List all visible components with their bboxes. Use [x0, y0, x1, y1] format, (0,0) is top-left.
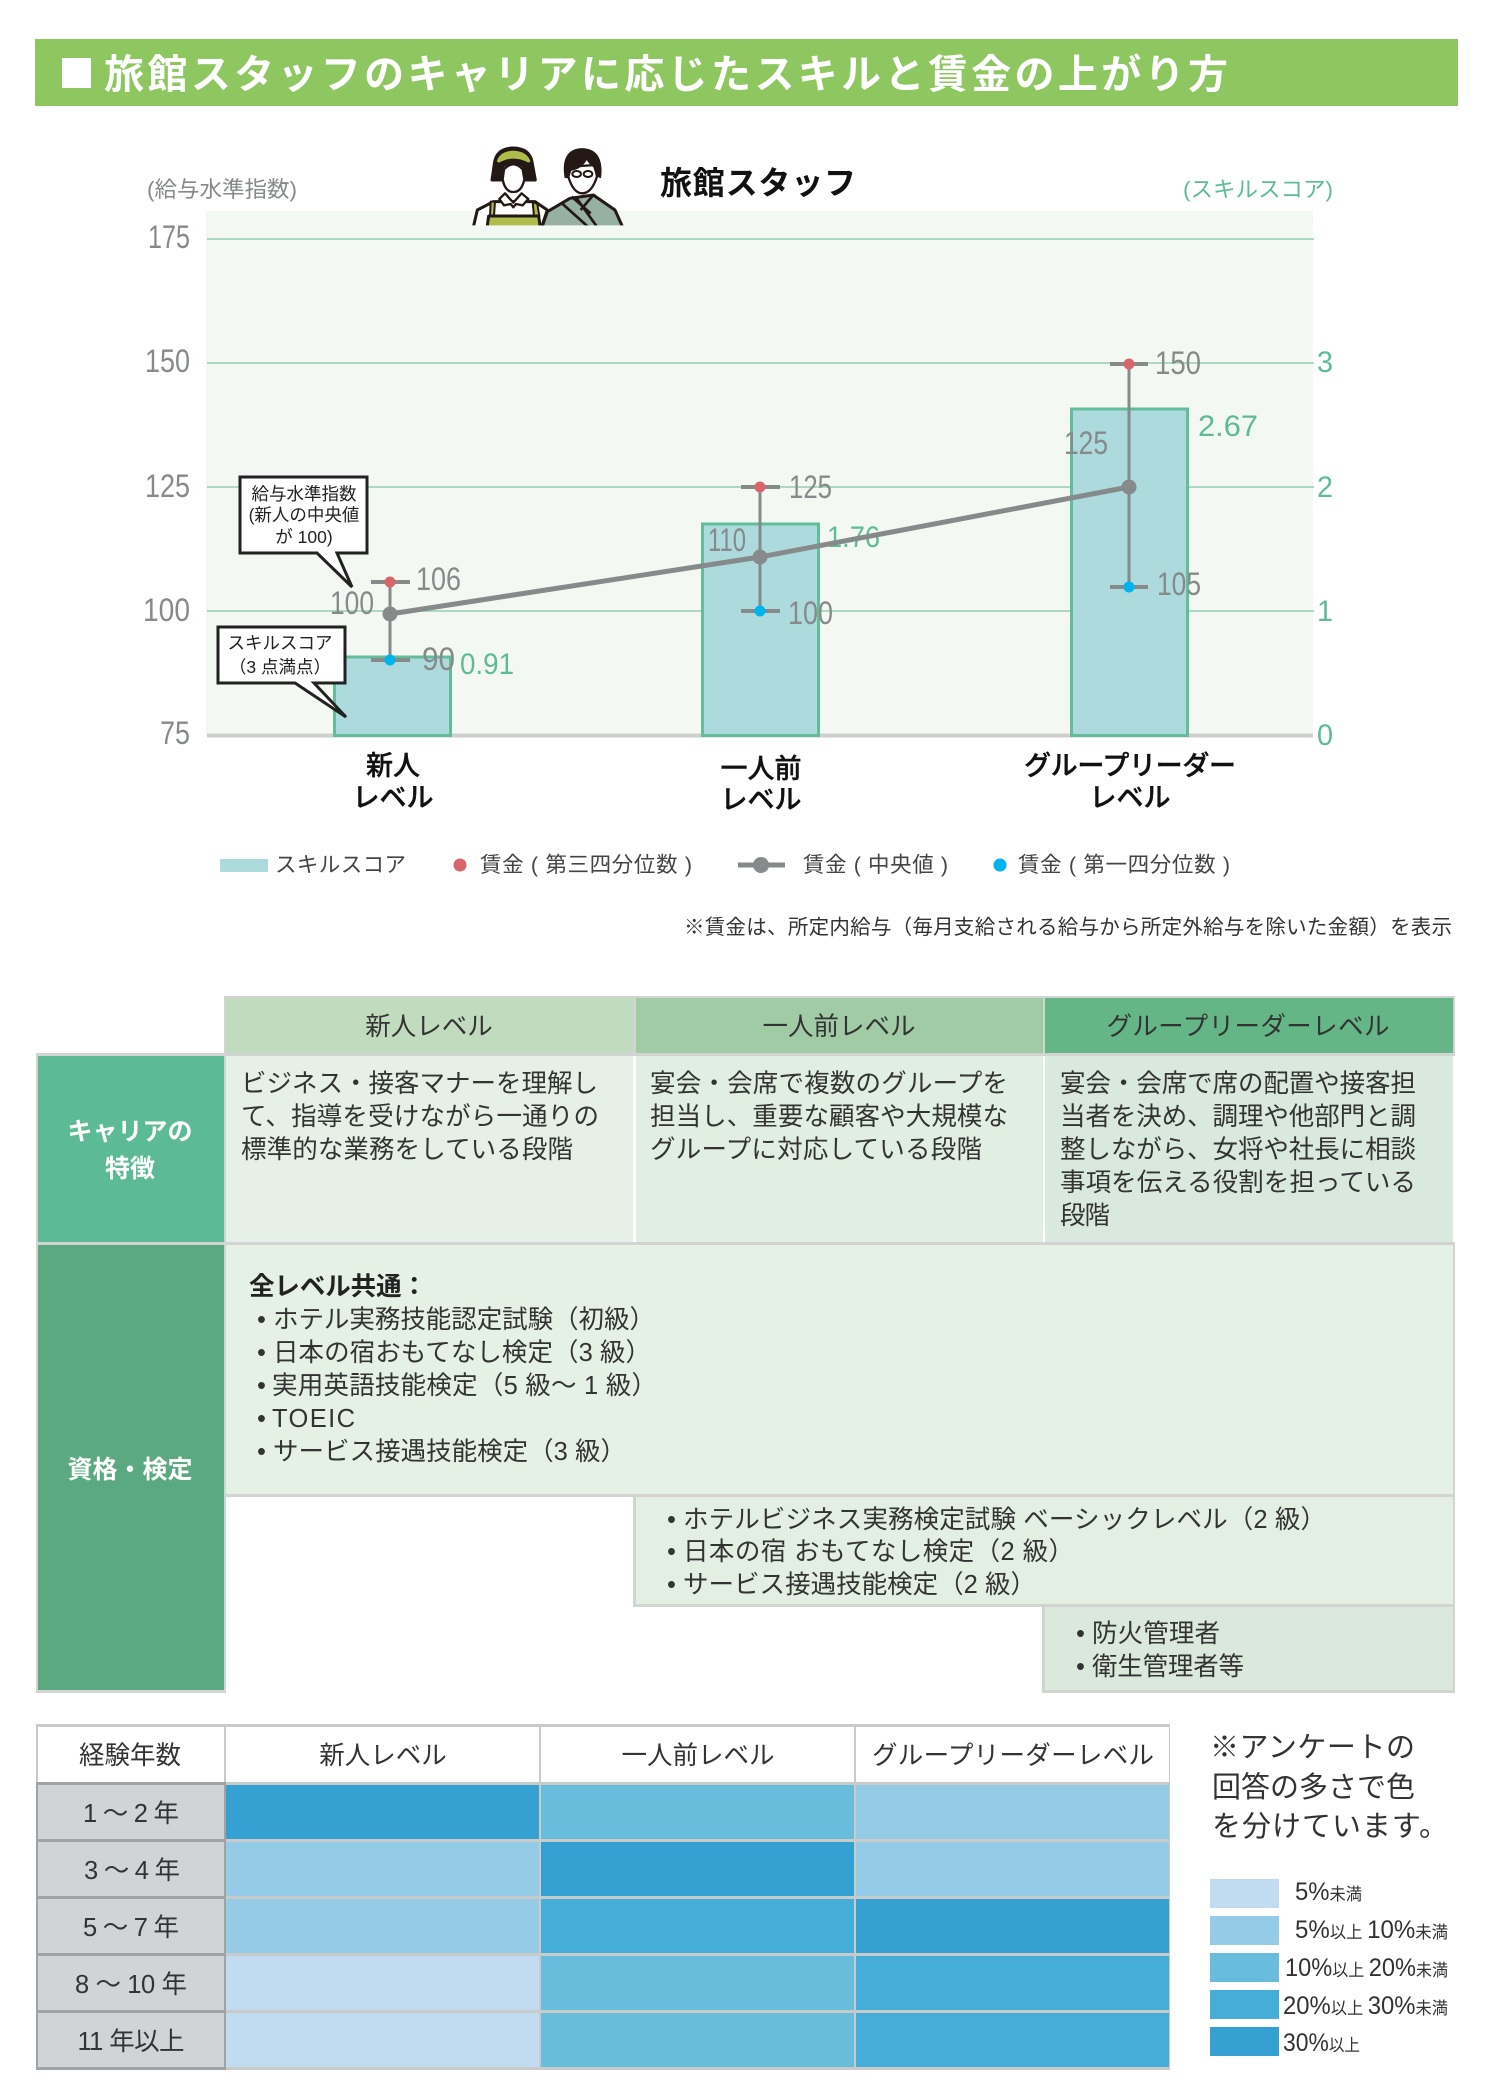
experience years heat table	[36, 1724, 1170, 2070]
right axis labels: 2	[1317, 471, 1333, 504]
block: qualifications for independent level and up	[633, 1494, 1455, 1607]
survey note: を分けています。	[1212, 1811, 1448, 1843]
category labels	[352, 751, 1236, 815]
chart: skill score and wage	[143, 211, 1333, 752]
cell: group leader characteristics	[1045, 1056, 1453, 1242]
callout: skill score: スキルスコア	[228, 633, 332, 653]
left axis title: (給与水準指数)	[147, 177, 297, 202]
cell: independent characteristics: グループに対応している段階	[650, 1136, 982, 1164]
block: qualifications for all levels: •	[257, 1438, 266, 1466]
right axis title: (スキルスコア)	[1183, 177, 1333, 202]
data value labels: 106	[416, 561, 461, 597]
block: qualifications for all levels: •	[257, 1306, 266, 1334]
left axis labels: 175	[148, 219, 190, 255]
data value labels	[330, 345, 1258, 681]
left axis labels: 125	[145, 468, 190, 504]
header: independent level	[636, 998, 1043, 1053]
chart subtitle: ryokan staff: 旅館スタッフ	[660, 165, 856, 201]
cell: group leader characteristics: 段階	[1060, 1202, 1110, 1230]
table header row: 新人レベル	[319, 1742, 447, 1770]
row label column: 8 ～ 10 年	[75, 1971, 187, 1999]
data value labels: 100	[788, 595, 833, 631]
category labels: グループリーダー	[1024, 751, 1236, 781]
row label column: 11 年以上	[78, 2028, 184, 2056]
block: qualifications for all levels: 実用英語技能検定（5 級～ 1 級）	[272, 1372, 657, 1400]
block: qualifications for group leader level: •	[1076, 1653, 1085, 1681]
table header row: 経験年数	[79, 1742, 181, 1770]
data value labels: 1.76	[827, 521, 880, 554]
heat legend: 30%以上	[1283, 2029, 1360, 2057]
block: qualifications for group leader level: 衛生管理者等	[1092, 1653, 1244, 1681]
heat legend: 10%以上 20%未満	[1285, 1954, 1448, 1982]
callout: skill score: （3 点満点）	[229, 657, 331, 677]
cell: group leader characteristics: 宴会・会席で席の配置や接客担	[1060, 1070, 1416, 1098]
block: qualifications for independent level and up: •	[667, 1571, 676, 1599]
bar: group leader skill score	[1072, 409, 1188, 736]
row label: career characteristics	[36, 1053, 226, 1245]
right axis labels: 1	[1317, 595, 1333, 628]
header: independent level: 一人前レベル	[762, 1013, 916, 1041]
chart legend	[220, 853, 1230, 877]
category labels: レベル	[352, 783, 434, 813]
row label: qualifications	[36, 1242, 226, 1693]
callout: salary index	[240, 477, 367, 587]
block: qualifications for independent level and up: ホテルビジネス実務検定試験 ベーシックレベル（2 級）	[683, 1506, 1326, 1534]
wage markers	[382, 358, 1136, 666]
cell: new staff characteristics: て、指導を受けながら一通りの	[241, 1103, 599, 1131]
category labels: レベル	[720, 785, 802, 815]
data value labels: 125	[789, 469, 832, 505]
data value labels: 90	[422, 641, 455, 677]
block: qualifications for all levels: サービス接遇技能検定（3 級）	[273, 1438, 626, 1466]
row label column: 5 ～ 7 年	[83, 1914, 179, 1942]
data value labels: 125	[1064, 425, 1108, 461]
data value labels: 110	[708, 522, 746, 558]
category labels: レベル	[1090, 783, 1170, 813]
cell: new staff characteristics: ビジネス・接客マナーを理解し	[241, 1070, 598, 1098]
right axis labels	[1317, 346, 1333, 752]
survey note: ※アンケートの	[1210, 1732, 1415, 1764]
cell: new staff characteristics: 標準的な業務をしている段階	[241, 1136, 573, 1164]
block: qualifications for independent level and up: サービス接遇技能検定（2 級）	[683, 1571, 1036, 1599]
icon: ryokan staff	[473, 148, 624, 230]
bar: independent level skill score	[702, 524, 818, 736]
heat cells	[226, 1785, 1169, 2067]
block: qualifications for all levels: •	[257, 1372, 266, 1400]
heat legend: 20%以上 30%未満	[1283, 1992, 1448, 2020]
row label column: 3 ～ 4 年	[84, 1857, 180, 1885]
data value labels: 100	[330, 585, 374, 621]
table header row: 一人前レベル	[621, 1742, 775, 1770]
block: qualifications for group leader level	[1042, 1604, 1455, 1693]
row label column: 1 ～ 2 年	[83, 1800, 179, 1828]
heat legend: 5%以上 10%未満	[1295, 1916, 1448, 1944]
block: qualifications for independent level and up: •	[667, 1538, 676, 1566]
row label: career characteristics: 特徴	[105, 1155, 155, 1183]
left axis labels: 150	[145, 343, 190, 379]
block: qualifications for independent level and up: 日本の宿 おもてなし検定（2 級）	[683, 1538, 1074, 1566]
data value labels: 105	[1157, 566, 1201, 602]
block: qualifications for all levels: TOEIC	[272, 1405, 355, 1433]
footnote: ※賃金は、所定内給与（毎月支給される給与から所定外給与を除いた金額）を表示	[684, 916, 1452, 939]
left axis labels: 100	[143, 592, 190, 628]
title banner: 旅館スタッフのキャリアに応じたスキルと賃金の上がり方	[104, 53, 1228, 97]
survey note	[1210, 1732, 1448, 1843]
cell: group leader characteristics: 当者を決め、調理や他部門と調	[1060, 1103, 1416, 1131]
block: qualifications for all levels: 全レベル共通：	[249, 1273, 427, 1301]
block: qualifications for all levels	[226, 1245, 1455, 1497]
career table	[36, 996, 1455, 1693]
heat legend: 5%未満	[1295, 1878, 1362, 1906]
header: group leader level: グループリーダーレベル	[1106, 1013, 1390, 1041]
category labels: 新人	[366, 751, 420, 781]
header: new staff level	[226, 998, 633, 1053]
header: new staff level: 新人レベル	[365, 1013, 493, 1041]
wage range whiskers	[371, 364, 1148, 660]
block: qualifications for all levels: •	[257, 1339, 266, 1367]
block: qualifications for group leader level: •	[1076, 1620, 1085, 1648]
heat legend	[1210, 1878, 1448, 2057]
row label column	[36, 1782, 226, 2070]
callout: salary index: が 100)	[275, 527, 333, 547]
chart legend: 賃金 ( 第三四分位数 )	[480, 853, 692, 877]
survey note: 回答の多さで色	[1212, 1771, 1415, 1804]
block: qualifications for all levels: 日本の宿おもてなし検定（3 級）	[273, 1339, 651, 1367]
left axis labels: 75	[160, 715, 190, 751]
table header row: グループリーダーレベル	[872, 1742, 1154, 1770]
block: qualifications for all levels: ホテル実務技能認定試験（初級）	[273, 1306, 655, 1334]
table header row	[38, 1727, 1169, 1782]
cell: independent characteristics	[636, 1056, 1043, 1242]
block: qualifications for group leader level: 防火管理者	[1092, 1620, 1220, 1648]
cell: group leader characteristics: 整しながら、女将や社長に相談	[1060, 1136, 1416, 1164]
block: qualifications for independent level and up: •	[667, 1506, 676, 1534]
cell: group leader characteristics: 事項を伝える役割を担っている	[1060, 1169, 1416, 1197]
callout: salary index: (新人の中央値	[249, 505, 359, 525]
row label: qualifications: 資格・検定	[67, 1456, 193, 1484]
chart legend: スキルスコア	[275, 853, 406, 877]
bar: new staff skill score	[334, 657, 450, 736]
category labels: 一人前	[720, 754, 802, 784]
cell: independent characteristics: 宴会・会席で複数のグループを	[650, 1070, 1008, 1098]
right axis labels: 3	[1317, 346, 1333, 379]
data value labels: 0.91	[460, 648, 514, 681]
cell: new staff characteristics	[226, 1056, 633, 1242]
callout: skill score	[218, 627, 346, 717]
callout: salary index: 給与水準指数	[252, 484, 356, 504]
data value labels: 2.67	[1198, 410, 1258, 443]
median wage line	[390, 487, 1129, 614]
data value labels: 150	[1155, 345, 1201, 381]
title banner	[35, 39, 1458, 106]
block: qualifications for all levels: •	[257, 1405, 266, 1433]
row label: career characteristics: キャリアの	[67, 1118, 193, 1146]
chart legend: 賃金 ( 第一四分位数 )	[1018, 853, 1230, 877]
cell: independent characteristics: 担当し、重要な顧客や大規模な	[650, 1103, 1008, 1131]
right axis labels: 0	[1317, 719, 1333, 752]
header: group leader level	[1045, 998, 1453, 1053]
left axis labels	[143, 219, 190, 751]
chart legend: 賃金 ( 中央値 )	[803, 853, 948, 877]
